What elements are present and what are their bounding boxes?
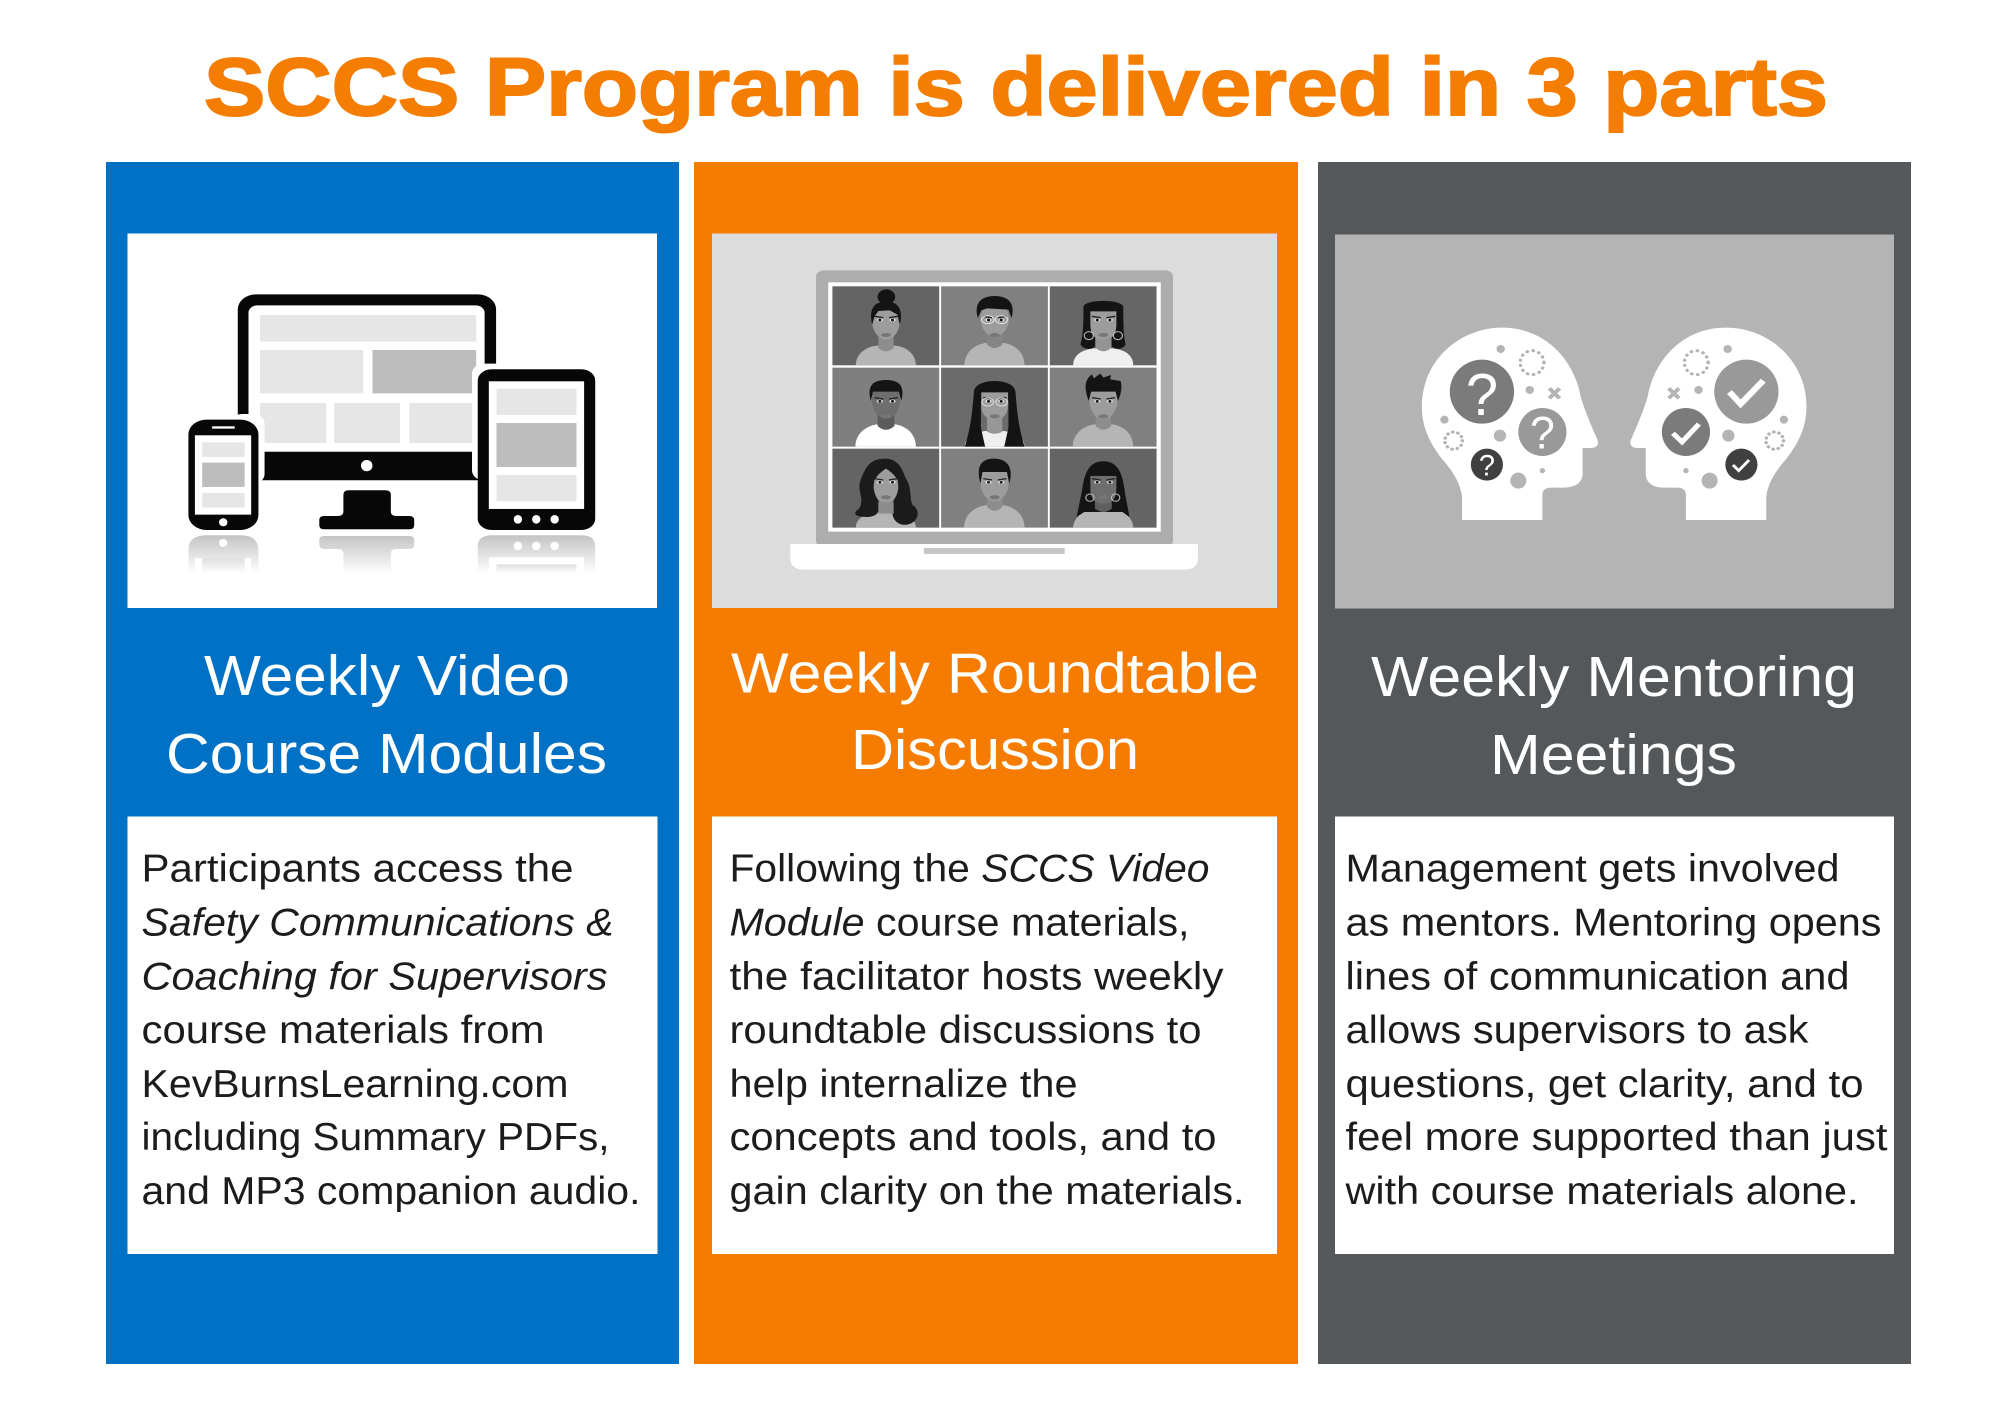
heading: weekly roundtable discussion: Weekly Roundtable: [731, 642, 1259, 706]
video tile 9: [1050, 449, 1157, 528]
icon: laptop with video call grid: [790, 270, 1198, 570]
text box: roundtable description: [712, 816, 1277, 1254]
text box: mentoring description: lines of communication and: [1346, 956, 1850, 998]
icon: tablet: [472, 364, 595, 530]
icon: device reflections: [188, 535, 595, 573]
video tile 8: [941, 449, 1048, 528]
text box: roundtable description: the facilitator hosts weekly: [730, 956, 1224, 998]
icon: head with questions: [1422, 328, 1598, 520]
text box: video modules description: Coaching for Supervisors: [142, 956, 608, 998]
video tile 5: [941, 368, 1048, 447]
heading: weekly roundtable discussion: Discussion: [851, 718, 1139, 782]
video tile 3: [1050, 286, 1157, 365]
text box: mentoring description: feel more supported than just: [1346, 1116, 1888, 1159]
video tile 7: [832, 449, 939, 528]
text box: video modules description: [128, 816, 658, 1254]
text box: mentoring description: questions, get clarity, and to: [1346, 1063, 1864, 1106]
panel: weekly roundtable discussion: [694, 162, 1298, 1364]
title: SCCS Program is delivered in 3 parts: [204, 42, 1828, 133]
text box: roundtable description: Following the SCCS Video: [730, 848, 1210, 890]
panel: weekly video course modules: [106, 162, 679, 1364]
heading: weekly video course modules: [166, 644, 607, 786]
text box: mentoring description: Management gets involved: [1346, 848, 1840, 890]
heading: weekly mentoring meetings: [1371, 645, 1857, 787]
text box: video modules description: including Summary PDFs,: [142, 1116, 610, 1159]
text box: video modules description: Participants access the: [142, 848, 574, 890]
text box: roundtable description: roundtable discussions to: [730, 1009, 1202, 1052]
heading: weekly roundtable discussion: [731, 642, 1259, 782]
text box: video modules description: Safety Communications &: [142, 902, 614, 944]
text box: mentoring description: [1335, 816, 1894, 1254]
icon: desktop monitor: [238, 294, 496, 529]
icon: head with questions: ?: [1479, 449, 1495, 483]
heading: weekly mentoring meetings: Meetings: [1490, 723, 1737, 787]
video tile 2: [941, 286, 1048, 365]
video tile 6: [1050, 368, 1157, 447]
text box: mentoring description: allows supervisors to ask: [1346, 1009, 1809, 1052]
icon: head with check marks: [1630, 328, 1806, 520]
text box: video modules description: and MP3 companion audio.: [142, 1170, 640, 1213]
heading: weekly mentoring meetings: Weekly Mentoring: [1371, 645, 1857, 709]
video tile 1: [832, 286, 939, 365]
image box: mentoring heads: [1335, 234, 1894, 608]
text box: roundtable description: gain clarity on the materials.: [730, 1170, 1244, 1213]
heading: weekly video course modules: Weekly Video: [204, 644, 570, 708]
icon: two heads: [1422, 328, 1806, 520]
icon: responsive devices: [188, 294, 595, 573]
text box: video modules description: course materials from: [142, 1009, 544, 1052]
panel: weekly mentoring meetings: [1318, 162, 1911, 1364]
text box: roundtable description: Module course materials,: [730, 902, 1190, 944]
heading: weekly video course modules: Course Modules: [166, 722, 607, 786]
text box: roundtable description: concepts and tools, and to: [730, 1116, 1216, 1159]
text box: mentoring description: as mentors. Mentoring opens: [1346, 902, 1882, 944]
text box: roundtable description: help internalize the: [730, 1063, 1078, 1106]
icon: head with questions: ?: [1530, 407, 1555, 459]
video tile 4: [832, 368, 939, 447]
icon: head with questions: ?: [1466, 362, 1498, 428]
text box: mentoring description: with course materials alone.: [1344, 1170, 1858, 1213]
icon: phone: [188, 414, 265, 530]
image box: video call laptop: [712, 234, 1277, 608]
image box: devices: [128, 234, 657, 608]
text box: video modules description: KevBurnsLearning.com: [142, 1063, 568, 1106]
